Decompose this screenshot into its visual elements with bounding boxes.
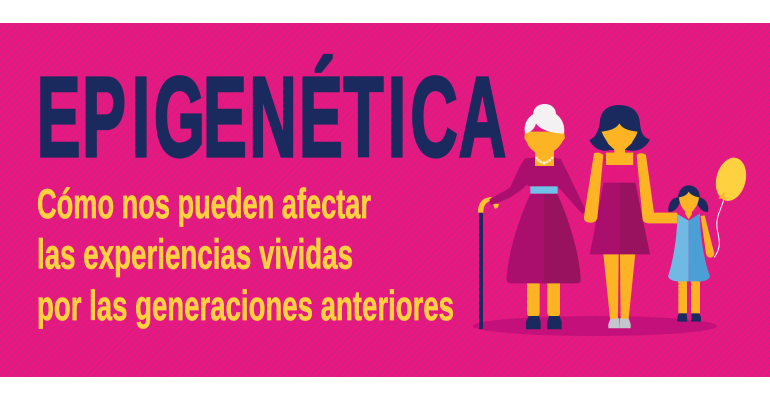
shoes — [677, 313, 701, 322]
shoes — [608, 318, 631, 328]
legs — [603, 253, 635, 319]
arm: left — [584, 153, 603, 223]
face — [679, 192, 699, 212]
subtitle text block — [37, 180, 454, 329]
legs — [527, 282, 560, 317]
figure: grandmother with cane — [478, 104, 586, 329]
hair — [525, 104, 564, 134]
subtitle text block: por las generaciones anteriores — [37, 282, 454, 329]
belt — [530, 186, 558, 194]
icon: balloon — [711, 154, 751, 257]
title: EPIGENÉTICA — [37, 53, 506, 180]
neck — [535, 148, 554, 167]
legs — [678, 278, 700, 313]
dress — [668, 213, 710, 281]
icon: cane — [478, 197, 492, 329]
face — [524, 132, 565, 154]
arm — [701, 215, 714, 258]
necklace — [535, 157, 553, 165]
subtitle text block: las experiencias vividas — [37, 230, 353, 278]
pigtails — [668, 197, 708, 212]
skirt — [507, 194, 581, 283]
face — [602, 123, 637, 149]
hand on cane — [493, 203, 499, 209]
arms and bodice — [489, 158, 586, 214]
hair — [678, 185, 700, 200]
figure: mother — [584, 105, 677, 328]
arm: right reaching to child — [637, 153, 677, 223]
ground shadow — [473, 316, 717, 336]
figure: child with balloon — [668, 154, 751, 322]
neck — [685, 208, 692, 219]
subtitle text block: Cómo nos pueden afectar — [37, 180, 371, 227]
skirt — [590, 183, 650, 254]
neck and chest — [606, 145, 633, 165]
bodice — [602, 153, 637, 183]
shoes — [526, 316, 562, 329]
hair — [589, 105, 650, 151]
